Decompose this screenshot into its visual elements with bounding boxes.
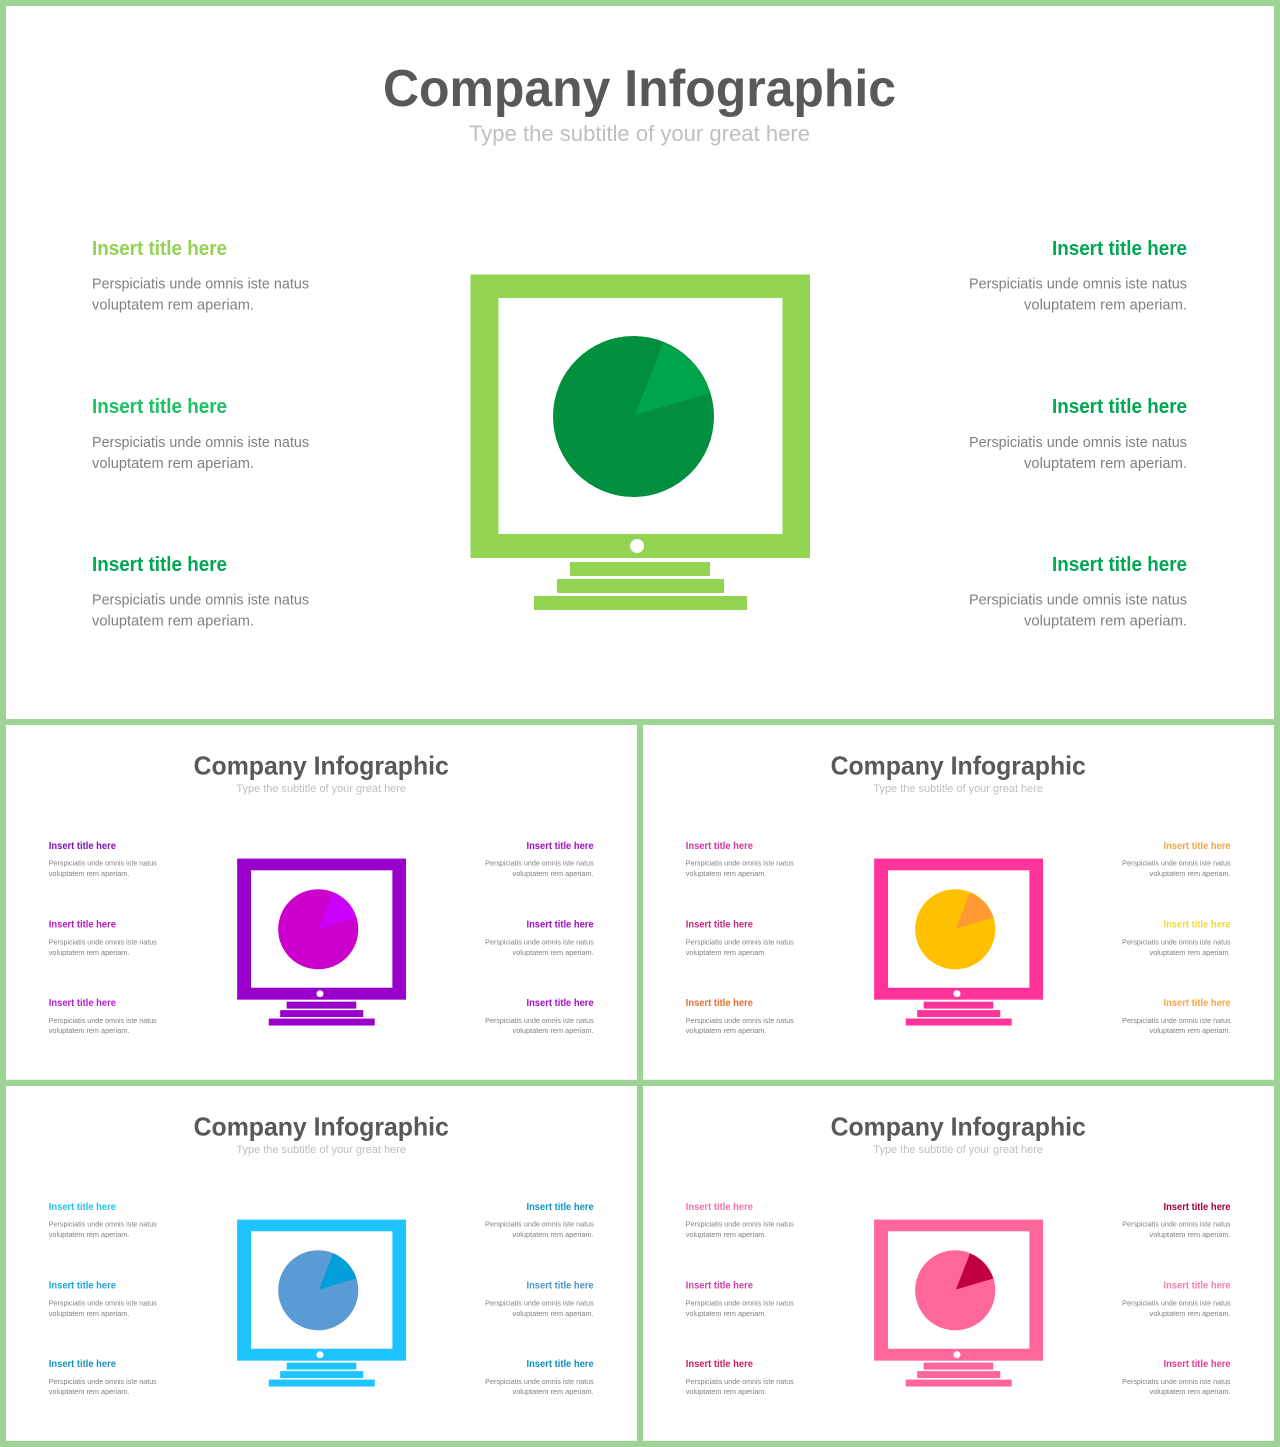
text block: left 1: Perspiciatis unde omnis iste natus — [686, 859, 794, 868]
text block: left 3: Perspiciatis unde omnis iste natus — [686, 1016, 794, 1025]
text block: left 3: Insert title here — [92, 554, 227, 576]
text block: right 3 — [485, 998, 594, 1035]
subtitle: Type the subtitle of your great here — [469, 121, 810, 146]
text block: right 1: voluptatem rem aperiam. — [1150, 869, 1231, 878]
subtitle: Type the subtitle of your great here — [236, 1144, 406, 1156]
text block: left 3: voluptatem rem aperiam. — [92, 612, 254, 630]
text block: left 2: Perspiciatis unde omnis iste natus — [686, 1298, 794, 1307]
text block: left 3 — [49, 1359, 157, 1396]
text block: right 2: Perspiciatis unde omnis iste natus — [1122, 937, 1231, 946]
text block: right 1: Insert title here — [1052, 238, 1187, 260]
text block: left 3: Insert title here — [49, 998, 116, 1009]
text block: right 1 — [485, 1202, 594, 1239]
text block: right 3: voluptatem rem aperiam. — [1150, 1387, 1231, 1396]
text block: right 2: Insert title here — [526, 1281, 594, 1292]
text block: right 2: Perspiciatis unde omnis iste natus — [485, 937, 594, 946]
text block: left 3 — [686, 998, 794, 1035]
text block: left 1: voluptatem rem aperiam. — [92, 296, 254, 314]
subtitle: Type the subtitle of your great here — [873, 783, 1043, 795]
panel: rose slide — [643, 1086, 1274, 1441]
text block: right 3: voluptatem rem aperiam. — [1150, 1026, 1231, 1035]
text block: right 2: Insert title here — [1163, 1281, 1231, 1292]
text block: left 2: Insert title here — [686, 1281, 753, 1292]
text block: left 1: voluptatem rem aperiam. — [49, 1230, 129, 1239]
text block: right 3 — [485, 1359, 594, 1396]
text block: right 3: Perspiciatis unde omnis iste natus — [485, 1016, 594, 1025]
text block: left 3: voluptatem rem aperiam. — [686, 1026, 766, 1035]
text block: left 1: Insert title here — [49, 1202, 116, 1213]
icon: monitor with pie chart — [874, 1220, 1043, 1387]
text block: left 1: Perspiciatis unde omnis iste natus — [49, 1220, 157, 1229]
text block: right 3: voluptatem rem aperiam. — [513, 1387, 594, 1396]
text block: left 1: voluptatem rem aperiam. — [49, 869, 129, 878]
icon: monitor with pie chart — [874, 859, 1043, 1026]
text block: left 3: voluptatem rem aperiam. — [49, 1026, 129, 1035]
text block: right 3: Insert title here — [1163, 1359, 1231, 1370]
text block: left 2: voluptatem rem aperiam. — [686, 1309, 766, 1318]
icon: monitor with pie chart — [237, 859, 406, 1026]
text block: left 1: Perspiciatis unde omnis iste natus — [686, 1220, 794, 1229]
text block: left 2: Insert title here — [686, 920, 753, 931]
text block: left 2: Perspiciatis unde omnis iste natus — [49, 937, 157, 946]
text block: right 1: Perspiciatis unde omnis iste natus — [1122, 859, 1231, 868]
text block: right 1: Perspiciatis unde omnis iste natus — [485, 1220, 594, 1229]
text block: left 3: Perspiciatis unde omnis iste natus — [686, 1377, 794, 1386]
text block: right 1 — [1122, 841, 1231, 878]
subtitle: Type the subtitle of your great here — [236, 783, 406, 795]
text block: left 2: Insert title here — [49, 920, 116, 931]
panel: large green slide — [6, 6, 1274, 719]
text block: right 2: Insert title here — [1052, 396, 1187, 418]
text block: right 1: Perspiciatis unde omnis iste natus — [1122, 1220, 1231, 1229]
text block: right 1: voluptatem rem aperiam. — [1024, 296, 1187, 314]
text block: right 1 — [1122, 1202, 1231, 1239]
text block: left 2 — [686, 1281, 794, 1318]
text block: right 1: Insert title here — [1163, 1202, 1231, 1213]
text block: left 1: Perspiciatis unde omnis iste natus — [49, 859, 157, 868]
text block: right 3: Insert title here — [526, 1359, 594, 1370]
text block: right 1: voluptatem rem aperiam. — [513, 1230, 594, 1239]
text block: right 3: Perspiciatis unde omnis iste natus — [1122, 1016, 1231, 1025]
text block: left 3: voluptatem rem aperiam. — [686, 1387, 766, 1396]
text block: left 1 — [49, 1202, 157, 1239]
title: Company Infographic — [831, 753, 1086, 781]
text block: right 3: Insert title here — [526, 998, 594, 1009]
text block: left 2: Insert title here — [49, 1281, 116, 1292]
text block: right 2 — [485, 1281, 594, 1318]
text block: right 3 — [969, 554, 1187, 630]
subtitle: Type the subtitle of your great here — [873, 1144, 1043, 1156]
text block: right 1: Perspiciatis unde omnis iste natus — [969, 276, 1187, 292]
text block: left 2: voluptatem rem aperiam. — [686, 948, 766, 957]
text block: right 1 — [969, 238, 1187, 314]
text block: right 2 — [969, 396, 1187, 472]
text block: left 3: Perspiciatis unde omnis iste natus — [49, 1377, 157, 1386]
text block: left 1 — [49, 841, 157, 878]
text block: left 2: Perspiciatis unde omnis iste natus — [686, 937, 794, 946]
text block: right 3 — [1122, 1359, 1231, 1396]
icon: monitor with pie chart — [470, 274, 810, 610]
title: Company Infographic — [383, 60, 896, 118]
text block: left 1 — [686, 1202, 794, 1239]
text block: right 1 — [485, 841, 594, 878]
text block: right 2: Perspiciatis unde omnis iste natus — [1122, 1298, 1231, 1307]
text block: left 3: Perspiciatis unde omnis iste natus — [92, 592, 309, 608]
text block: left 2: voluptatem rem aperiam. — [49, 948, 129, 957]
text block: right 2: voluptatem rem aperiam. — [513, 948, 594, 957]
text block: right 1: Perspiciatis unde omnis iste natus — [485, 859, 594, 868]
text block: left 2 — [49, 1281, 157, 1318]
text block: right 3: Perspiciatis unde omnis iste natus — [1122, 1377, 1231, 1386]
text block: right 3: Insert title here — [1052, 554, 1187, 576]
text block: left 2: Insert title here — [92, 396, 227, 418]
text block: right 2: Perspiciatis unde omnis iste natus — [485, 1298, 594, 1307]
text block: left 1 — [92, 238, 309, 314]
text block: right 3: voluptatem rem aperiam. — [513, 1026, 594, 1035]
panel: blue slide — [6, 1086, 637, 1441]
text block: left 1: Insert title here — [686, 841, 753, 852]
text block: left 1 — [686, 841, 794, 878]
text block: right 3: Perspiciatis unde omnis iste natus — [969, 592, 1187, 608]
text block: left 3: Insert title here — [686, 998, 753, 1009]
text block: right 2: Insert title here — [526, 920, 594, 931]
text block: left 3: Perspiciatis unde omnis iste natus — [49, 1016, 157, 1025]
text block: right 2: voluptatem rem aperiam. — [1150, 1309, 1231, 1318]
text block: right 1: voluptatem rem aperiam. — [1150, 1230, 1231, 1239]
text block: left 2: voluptatem rem aperiam. — [49, 1309, 129, 1318]
text block: left 2 — [92, 396, 309, 472]
text block: left 3: Insert title here — [686, 1359, 753, 1370]
text block: left 2 — [686, 920, 794, 957]
text block: right 1: Insert title here — [526, 841, 594, 852]
text block: right 2: Perspiciatis unde omnis iste natus — [969, 434, 1187, 451]
text block: right 2 — [485, 920, 594, 957]
text block: right 2: voluptatem rem aperiam. — [513, 1309, 594, 1318]
text block: right 2: voluptatem rem aperiam. — [1150, 948, 1231, 957]
text block: right 1: Insert title here — [1163, 841, 1231, 852]
text block: right 2 — [1122, 1281, 1231, 1318]
text block: left 3 — [49, 998, 157, 1035]
text block: left 1: voluptatem rem aperiam. — [686, 869, 766, 878]
panel: pink and yellow slide — [643, 725, 1274, 1080]
title: Company Infographic — [194, 1114, 449, 1142]
text block: left 3 — [686, 1359, 794, 1396]
text block: left 1: voluptatem rem aperiam. — [686, 1230, 766, 1239]
title: Company Infographic — [194, 753, 449, 781]
text block: right 1: voluptatem rem aperiam. — [513, 869, 594, 878]
text block: left 1: Insert title here — [686, 1202, 753, 1213]
text block: left 2 — [49, 920, 157, 957]
text block: left 1: Perspiciatis unde omnis iste natus — [92, 276, 309, 292]
text block: left 2: Perspiciatis unde omnis iste natus — [92, 434, 309, 451]
text block: left 2: Perspiciatis unde omnis iste natus — [49, 1298, 157, 1307]
text block: right 3 — [1122, 998, 1231, 1035]
text block: left 3 — [92, 554, 309, 630]
text block: right 3: Insert title here — [1163, 998, 1231, 1009]
icon: monitor with pie chart — [237, 1220, 406, 1387]
text block: right 3: Perspiciatis unde omnis iste natus — [485, 1377, 594, 1386]
text block: left 2: voluptatem rem aperiam. — [92, 455, 254, 472]
text block: left 3: voluptatem rem aperiam. — [49, 1387, 129, 1396]
text block: right 1: Insert title here — [526, 1202, 594, 1213]
text block: left 1: Insert title here — [49, 841, 116, 852]
text block: right 3: voluptatem rem aperiam. — [1024, 612, 1187, 630]
text block: left 3: Insert title here — [49, 1359, 116, 1370]
title: Company Infographic — [831, 1114, 1086, 1142]
text block: right 2 — [1122, 920, 1231, 957]
panel: purple slide — [6, 725, 637, 1080]
text block: left 1: Insert title here — [92, 238, 227, 260]
text block: right 2: Insert title here — [1163, 920, 1231, 931]
text block: right 2: voluptatem rem aperiam. — [1024, 455, 1187, 472]
